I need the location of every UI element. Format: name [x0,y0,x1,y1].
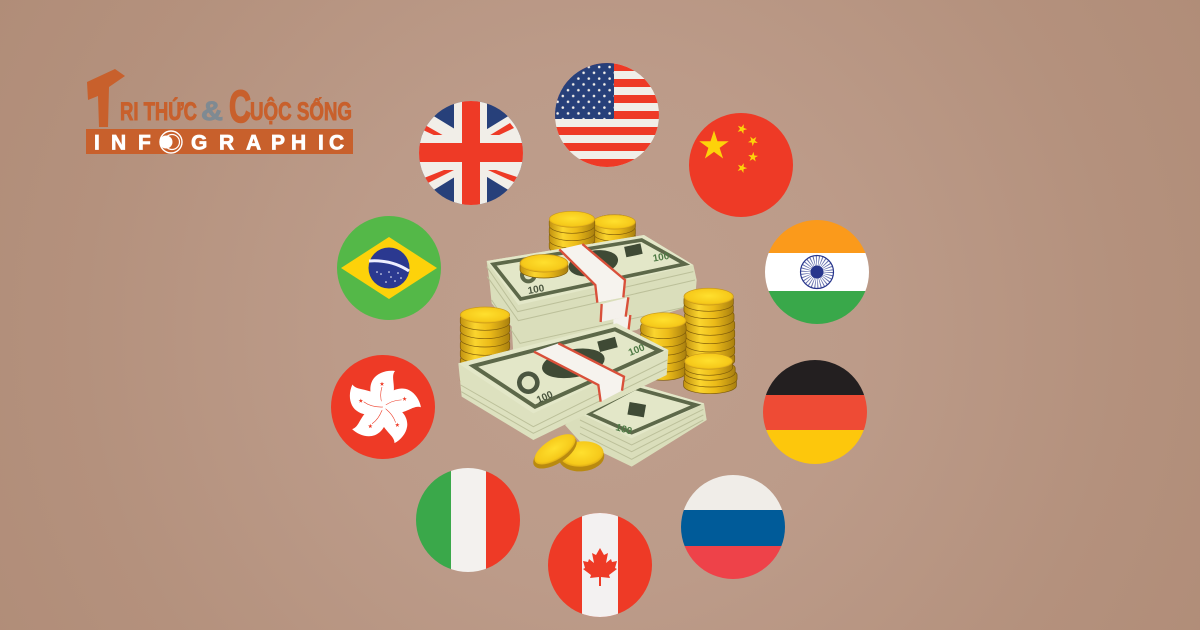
logo wordmark: Cuoc Song: UỘC SỐNG [250,96,352,126]
middle banknote stack [458,323,668,440]
band text: GRAPHIC: GRAPHIC [191,132,344,154]
infographic canvas [86,0,967,630]
band text: INF: INF [94,132,151,154]
right coin stack tall [684,288,735,369]
flag: Russia [681,475,785,579]
flag: Hong Kong [331,355,435,459]
flag: Canada [548,513,652,617]
upper banknote stack [487,235,697,353]
left coin stack [460,307,510,389]
loose coins bottom [528,428,605,475]
flag: Brazil [337,216,441,320]
upper banknote stack: 100 [652,251,671,265]
band icon: ring [160,131,182,153]
lower right banknote stack [565,383,707,467]
middle strap edges [534,343,624,402]
middle banknote stack: 100 [535,389,555,406]
logo mark: slanted T [87,69,125,127]
flag: United Kingdom [419,101,523,205]
flag: Italy [416,468,520,572]
middle banknote stack: 100 [627,342,647,359]
flag: Germany [763,360,867,464]
upper band straps [559,244,630,332]
logo wordmark: Cuoc: C [229,81,251,132]
right coin stack middle [641,313,686,380]
coins: back stacks [549,211,635,255]
flag: United States [555,63,659,167]
logo: Tri Thuc & Cuoc Song Infographic [86,69,353,154]
flag: China [689,113,793,217]
flag: India [765,220,869,324]
upper banknote stack: 100 [527,283,546,297]
lower right banknote stack: 100 [614,422,634,438]
loose coin on stack [520,255,568,278]
money pile illustration [458,211,737,475]
middle band strap [534,343,624,402]
logo ampersand: & [201,96,223,126]
logo band [86,129,353,154]
right coin stack front [684,353,737,394]
logo wordmark: Tri Thuc: RI THỨC [120,96,197,126]
